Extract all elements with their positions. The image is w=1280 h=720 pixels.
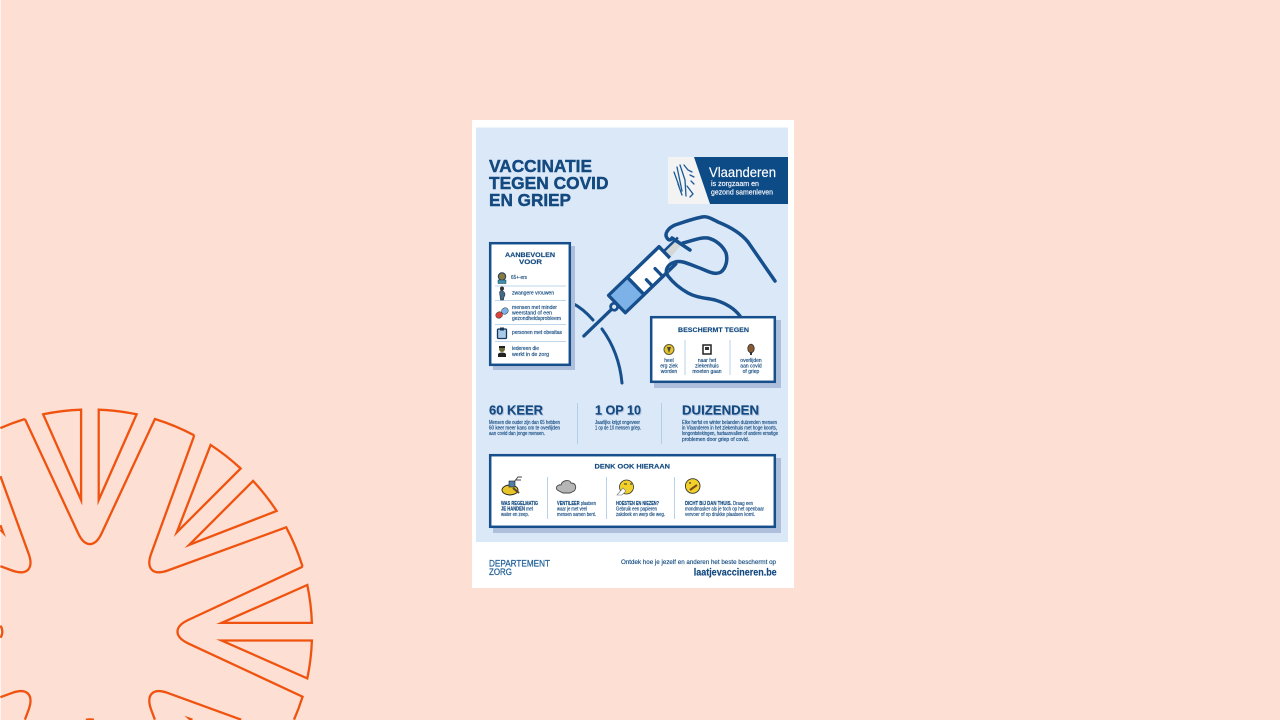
logo text: Vlaanderen bbox=[709, 164, 776, 180]
icon: care worker bbox=[498, 346, 506, 357]
tips text: mensen samen bent. bbox=[557, 512, 596, 518]
heading: recommended for: VOOR bbox=[519, 259, 542, 266]
protect text: naar het bbox=[698, 358, 717, 364]
protect text: overlijden bbox=[740, 358, 762, 364]
list text: weerstand of een bbox=[512, 310, 552, 316]
tips text: water en zeep. bbox=[501, 512, 529, 518]
stat: 1 op 10 bbox=[595, 402, 642, 432]
list text: personen met obesitas bbox=[512, 330, 562, 336]
logo text bbox=[709, 164, 776, 196]
list text: 65+-ers bbox=[511, 275, 527, 281]
title bbox=[489, 156, 608, 210]
poster blue panel bbox=[476, 128, 788, 542]
tips text: DICHT BIJ DAN THUIS. Draag een bbox=[685, 501, 753, 507]
protect text: aan covid bbox=[740, 364, 762, 370]
stat: 60 keer: 60 keer meer kans om te overlijden bbox=[489, 426, 560, 432]
protect text: ziekenhuis bbox=[695, 364, 719, 370]
heading: recommended for bbox=[505, 252, 555, 266]
stat: 1 op 10: 1 op de 10 mensen griep. bbox=[595, 426, 641, 432]
icon: Flemish lion bbox=[674, 165, 694, 197]
title: VACCINATIE bbox=[489, 156, 592, 176]
logo text: is zorgzaam en bbox=[711, 179, 759, 188]
decorative orange star emblem bbox=[0, 410, 312, 720]
tips text: vervoer of op drukke plaatsen komt. bbox=[685, 512, 755, 518]
tips text: WAS REGELMATIG bbox=[501, 501, 538, 507]
stat: 1 op 10: Jaarlijks krijgt ongeveer bbox=[595, 420, 640, 426]
tips text: zakdoek en werp die weg. bbox=[616, 512, 665, 518]
footer: department: ZORG bbox=[489, 567, 512, 578]
stat: 1 op 10: 1 OP 10 bbox=[596, 404, 642, 418]
tips text: Gebruik een papieren bbox=[616, 506, 657, 512]
protect text: moeten gaan bbox=[692, 369, 722, 375]
list text: gezondheidsprobleem bbox=[512, 316, 561, 322]
icon: pill bbox=[495, 307, 509, 319]
protect text: of griep bbox=[743, 369, 760, 375]
stat: 60 keer: 60 KEER bbox=[489, 402, 544, 418]
list text bbox=[511, 275, 562, 358]
footer: call to action bbox=[621, 559, 777, 578]
footer: department bbox=[489, 559, 550, 578]
icon: mask face bbox=[685, 479, 700, 493]
title: TEGEN COVID bbox=[489, 173, 608, 193]
icon: sick face bbox=[664, 344, 674, 354]
icon: coughing face bbox=[617, 480, 634, 495]
protect text: heel bbox=[664, 358, 674, 364]
list text: mensen met minder bbox=[512, 305, 557, 311]
stat: 60 keer: 60 KEER bbox=[490, 404, 545, 418]
stat: duizenden: longontstekingen, hartaanvallen of andere ernstige bbox=[682, 431, 778, 437]
icon: washing hands bbox=[502, 477, 522, 495]
stat: 60 keer bbox=[489, 402, 560, 437]
tips text: JE HANDEN met bbox=[501, 506, 533, 512]
list text: werkt in de zorg bbox=[512, 352, 549, 358]
list text: iedereen die bbox=[512, 346, 539, 352]
protect text: erg ziek bbox=[660, 364, 678, 370]
icon: senior bbox=[498, 273, 506, 284]
tips text bbox=[501, 501, 764, 518]
stat: 60 keer: aan covid dan jonge mensen. bbox=[489, 431, 545, 437]
panel: protects against bbox=[651, 317, 781, 388]
stat: duizenden: problemen door griep of covid. bbox=[682, 437, 749, 443]
stat: 60 keer: Mensen die ouder zijn dan 65 hebben bbox=[489, 420, 560, 426]
icon: pregnant woman bbox=[500, 286, 505, 300]
protect text: worden bbox=[661, 369, 677, 375]
stat: 1 op 10: 1 OP 10 bbox=[595, 402, 641, 418]
tips text: VENTILEER plaatsen bbox=[557, 501, 596, 507]
stat: duizenden: Elke herfst en winter belanden duizenden mensen bbox=[682, 420, 777, 426]
icon: hospital bbox=[703, 345, 711, 354]
tips text: HOESTEN EN NIEZEN? bbox=[616, 501, 659, 507]
heading: protects against: BESCHERMT TEGEN bbox=[678, 327, 749, 334]
footer: call to action: Ontdek hoe je jezelf en anderen het beste beschermt op bbox=[621, 559, 776, 566]
icon: clipboard bbox=[498, 328, 506, 338]
icon: death bbox=[748, 344, 754, 355]
stat: duizenden: DUIZENDEN bbox=[683, 404, 760, 418]
tips text: waar je met veel bbox=[557, 506, 587, 512]
heading: also think of this: DENK OOK HIERAAN bbox=[594, 463, 670, 470]
logo: Vlaanderen bbox=[668, 157, 788, 204]
illustration: hand bbox=[664, 217, 775, 316]
panel: also think of this bbox=[490, 455, 781, 533]
stat: duizenden bbox=[682, 402, 778, 443]
stat: duizenden: in Vlaanderen in het ziekenhuis met hoge koorts, bbox=[682, 426, 777, 432]
title: EN GRIEP bbox=[489, 190, 571, 210]
illustration: syringe bbox=[576, 233, 690, 345]
illustration: arm bbox=[572, 303, 622, 383]
stat: duizenden: DUIZENDEN bbox=[682, 402, 759, 418]
poster sheet bbox=[472, 120, 794, 588]
panel: recommended for bbox=[490, 243, 575, 370]
list text: zwangere vrouwen bbox=[512, 290, 554, 296]
heading: recommended for: AANBEVOLEN bbox=[505, 252, 555, 259]
tips text: mondmasker als je toch op het openbaar bbox=[685, 506, 764, 512]
poster bbox=[472, 120, 794, 588]
logo text: gezond samenleven bbox=[711, 188, 773, 196]
footer: department: DEPARTEMENT bbox=[489, 559, 550, 570]
footer: call to action: laatjevaccineren.be bbox=[694, 566, 777, 578]
protect text bbox=[660, 358, 762, 375]
icon: cloud bbox=[556, 481, 576, 493]
